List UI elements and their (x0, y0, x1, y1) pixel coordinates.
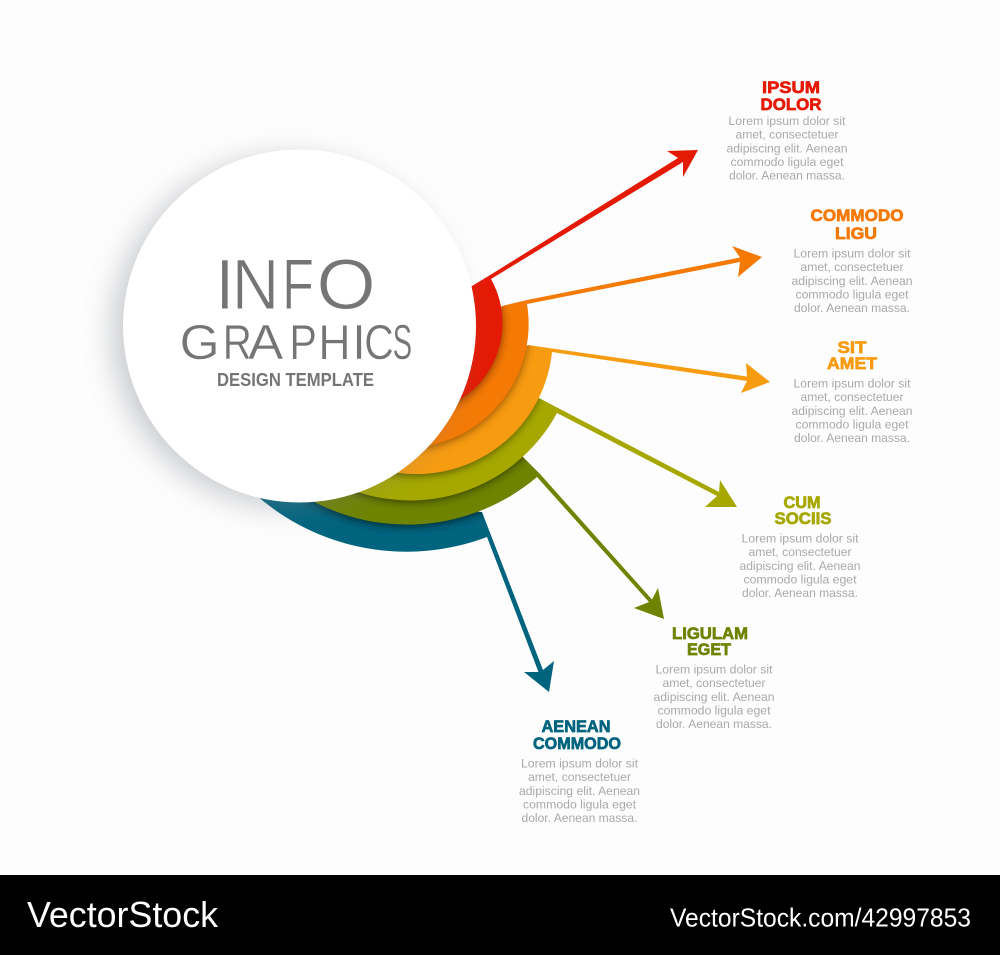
body text (654, 662, 774, 731)
heading (774, 493, 832, 528)
heading: LIGULAM (672, 624, 748, 643)
body text: amet, consectetuer (662, 676, 766, 690)
body text (792, 246, 912, 315)
body text: adipiscing elit. Aenean (726, 141, 848, 155)
subtitle: DESIGN TEMPLATE (217, 370, 374, 390)
heading: AENEAN (542, 717, 610, 736)
body text: commodo ligula eget (523, 798, 637, 812)
body text (726, 114, 848, 182)
title: INFO: N (232, 246, 279, 325)
text block: commodo ligu (792, 206, 912, 315)
body text (792, 376, 912, 445)
text block: sit amet (792, 338, 912, 445)
title: GRAPHICS (180, 316, 412, 370)
band and arrow: olive (358, 398, 737, 507)
body text: dolor. Aenean massa. (794, 301, 910, 315)
title: INFO: F (282, 246, 314, 325)
body text: Lorem ipsum dolor sit (794, 246, 911, 260)
text block: ligulam eget (654, 624, 774, 731)
band and arrow: amber (398, 345, 770, 474)
heading: EGET (687, 640, 732, 659)
title: GRAPHICS: G (180, 316, 220, 370)
body text: Lorem ipsum dolor sit (742, 532, 859, 546)
title: GRAPHICS: A (248, 316, 284, 370)
central circle shadow (113, 158, 461, 506)
band and arrow: green (314, 456, 664, 619)
body text: dolor. Aenean massa. (729, 168, 845, 182)
text block: ipsum dolor (726, 78, 848, 182)
body text: Lorem ipsum dolor sit (794, 376, 911, 390)
heading (533, 717, 621, 753)
band and arrow: orange (430, 246, 762, 446)
heading (672, 624, 748, 659)
body text: commodo ligula eget (730, 155, 844, 169)
body text: commodo ligula eget (796, 418, 909, 432)
title: GRAPHICS: R (223, 316, 252, 370)
body text: adipiscing elit. Aenean (792, 404, 912, 418)
body text: Lorem ipsum dolor sit (521, 756, 639, 770)
central white circle (123, 150, 476, 502)
text block: aenean commodo (519, 717, 640, 825)
footer logo text: VectorStock (27, 894, 219, 935)
title: GRAPHICS: P (289, 316, 317, 370)
heading: LIGU (835, 224, 877, 243)
body text (740, 532, 860, 600)
body text: amet, consectetuer (800, 260, 904, 274)
body text: dolor. Aenean massa. (522, 811, 638, 825)
body text: amet, consectetuer (736, 128, 838, 142)
band and arrow: teal (259, 498, 554, 692)
title: INFO: O (316, 246, 376, 325)
body text: dolor. Aenean massa. (742, 586, 858, 600)
heading: COMMODO (810, 206, 904, 225)
heading (760, 78, 822, 114)
heading: SIT (838, 338, 867, 357)
title: GRAPHICS: C (364, 316, 394, 370)
band and arrow: red (413, 150, 698, 413)
body text: adipiscing elit. Aenean (654, 690, 774, 704)
title: INFO: I (215, 246, 235, 325)
title: INFO (215, 246, 376, 325)
body text: commodo ligula eget (796, 288, 909, 302)
body text: adipiscing elit. Aenean (792, 274, 912, 288)
heading (810, 206, 904, 243)
title: GRAPHICS: H (318, 316, 351, 370)
title: GRAPHICS: I (352, 316, 366, 370)
heading: CUM (784, 493, 820, 512)
body text: Lorem ipsum dolor sit (656, 662, 773, 676)
body text: amet, consectetuer (748, 545, 852, 559)
body text: adipiscing elit. Aenean (519, 784, 640, 798)
heading: SOCIIS (774, 509, 832, 528)
title: GRAPHICS: S (393, 316, 412, 370)
body text: amet, consectetuer (800, 390, 904, 404)
body text: adipiscing elit. Aenean (740, 559, 860, 573)
watermark footer bar (0, 875, 1000, 955)
heading: COMMODO (533, 734, 621, 753)
body text: dolor. Aenean massa. (794, 431, 910, 445)
footer url text: VectorStock.com/42997853 (670, 902, 971, 932)
heading: AMET (827, 354, 878, 373)
title block (180, 246, 412, 390)
text block: cum sociis (740, 493, 860, 600)
body text (519, 756, 640, 825)
body text: Lorem ipsum dolor sit (728, 114, 846, 128)
heading: IPSUM (762, 78, 820, 97)
body text: commodo ligula eget (744, 572, 857, 586)
body text: amet, consectetuer (528, 770, 631, 784)
heading: DOLOR (760, 95, 822, 114)
body text: commodo ligula eget (658, 704, 771, 718)
heading (827, 338, 878, 373)
body text: dolor. Aenean massa. (656, 717, 772, 731)
